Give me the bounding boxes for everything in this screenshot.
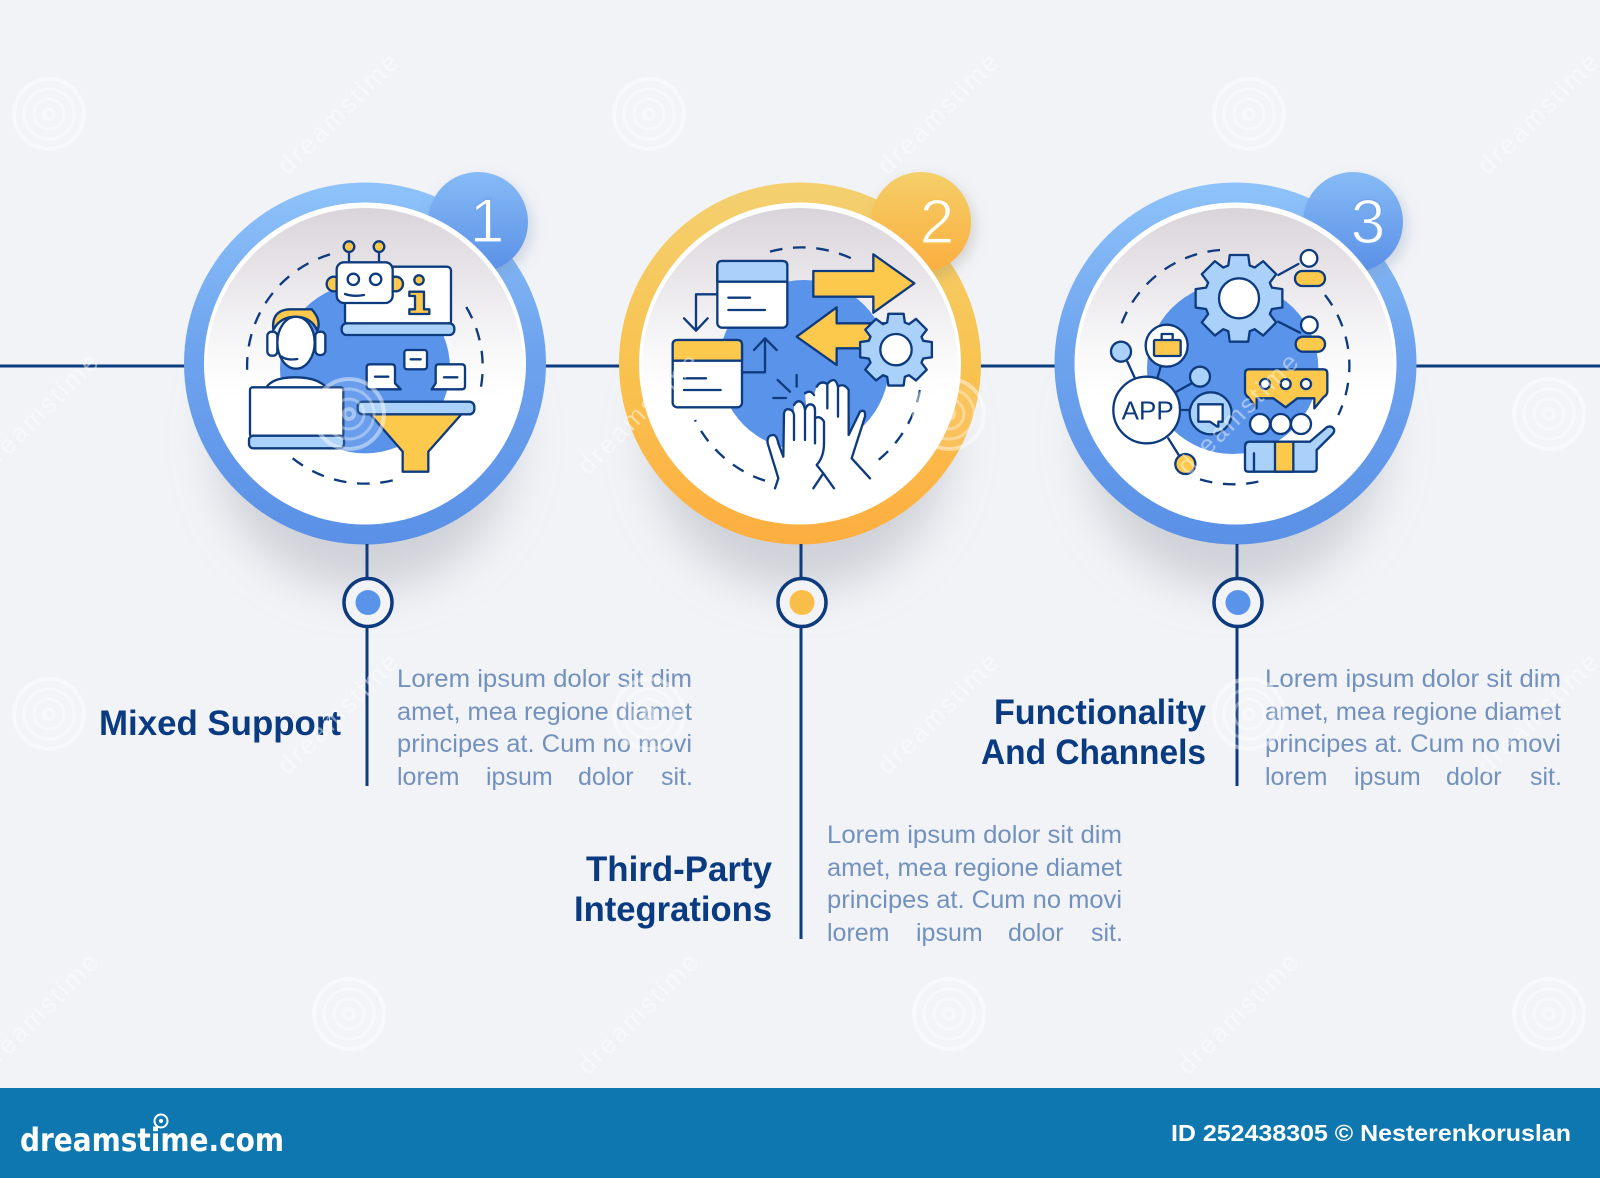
timeline marker 2 bbox=[778, 544, 826, 939]
heading: Functionality And Channels bbox=[981, 693, 1207, 772]
heading: Third-Party Integrations bbox=[574, 850, 773, 929]
text block: step 3: principes at. Cum no movi bbox=[1265, 730, 1561, 758]
badge shadow bbox=[875, 178, 975, 278]
outer ring bbox=[184, 182, 546, 544]
watermark overlay: dreamstime bbox=[1171, 945, 1306, 1080]
outer ring bbox=[619, 182, 981, 544]
watermark overlay: dreamstime bbox=[1171, 345, 1306, 480]
text block: step 2: amet, mea regione diamet bbox=[827, 854, 1122, 882]
text block: step 1: principes at. Cum no movi bbox=[397, 730, 692, 758]
text block: step 1: amet, mea regione diamet bbox=[397, 698, 692, 726]
number: 2 bbox=[920, 188, 954, 257]
horizontal connector line bbox=[0, 364, 1600, 368]
footer credit: ID 252438305 © Nesterenkoruslan bbox=[1171, 1120, 1571, 1146]
number badge bbox=[871, 172, 971, 272]
watermark overlay: dreamstime bbox=[571, 945, 706, 1080]
panel: step 2 circle bbox=[619, 172, 981, 590]
white disc bbox=[1074, 202, 1396, 524]
watermark overlay: dreamstime bbox=[271, 645, 406, 780]
text block: step 2: sit. bbox=[1091, 919, 1123, 947]
text block: step 2: lorem bbox=[827, 919, 890, 947]
heading: Third-Party Integrations: Integrations bbox=[574, 890, 772, 929]
text block: step 3: ipsum bbox=[1354, 763, 1421, 791]
watermark overlay: dreamstime bbox=[871, 645, 1006, 780]
shadow bbox=[650, 290, 950, 590]
badge shadow bbox=[1307, 178, 1407, 278]
timeline marker 3 bbox=[1214, 544, 1262, 786]
heading: Functionality And Channels: Functionality bbox=[994, 693, 1207, 732]
icon: third-party integrations bbox=[673, 247, 932, 488]
watermark overlay: dreamstime bbox=[871, 45, 1006, 180]
inner shaded disc bbox=[1078, 208, 1394, 524]
text block: step 2 bbox=[827, 821, 1123, 947]
app label: APP bbox=[1122, 395, 1174, 425]
text block: step 3: dolor bbox=[1446, 763, 1502, 791]
inner shaded disc bbox=[642, 208, 958, 524]
number: 3 bbox=[1351, 188, 1385, 257]
text block: step 3: sit. bbox=[1530, 763, 1562, 791]
watermark overlay: dreamstime bbox=[571, 345, 706, 480]
inner shaded disc bbox=[207, 208, 523, 524]
text block: step 1: ipsum bbox=[486, 763, 553, 791]
text block: step 3: Lorem ipsum dolor sit dim bbox=[1265, 665, 1561, 693]
text block: step 1: dolor bbox=[578, 763, 634, 791]
footer bar bbox=[0, 1088, 1600, 1178]
watermark overlay: dreamstime bbox=[271, 45, 406, 180]
icon: functionality and channels bbox=[1111, 250, 1349, 484]
text block: step 1: sit. bbox=[661, 763, 693, 791]
text block: step 3: amet, mea regione diamet bbox=[1265, 698, 1561, 726]
number badge bbox=[428, 172, 528, 272]
outer ring bbox=[1054, 182, 1416, 544]
text block: step 2: Lorem ipsum dolor sit dim bbox=[827, 821, 1122, 849]
text block: step 1 bbox=[397, 665, 693, 791]
number: 1 bbox=[470, 187, 504, 256]
timeline marker 1 bbox=[344, 544, 392, 786]
footer logo: dreamstime.com bbox=[20, 1121, 284, 1159]
text block: step 3: lorem bbox=[1265, 763, 1328, 791]
panel: step 3 circle bbox=[1054, 172, 1416, 590]
text block: step 1: Lorem ipsum dolor sit dim bbox=[397, 665, 692, 693]
text block: step 3 bbox=[1265, 665, 1562, 791]
text block: step 1: lorem bbox=[397, 763, 460, 791]
heading: Third-Party Integrations: Third-Party bbox=[586, 850, 773, 889]
text block: step 2: dolor bbox=[1008, 919, 1064, 947]
shadow bbox=[215, 290, 515, 590]
number badge bbox=[1303, 172, 1403, 272]
shadow bbox=[1086, 290, 1386, 590]
panel: step 1 circle bbox=[184, 172, 546, 590]
white disc bbox=[204, 202, 526, 524]
white disc bbox=[639, 202, 961, 524]
icon: mixed support bbox=[247, 241, 483, 484]
badge shadow bbox=[432, 178, 532, 278]
text block: step 2: ipsum bbox=[916, 919, 983, 947]
text block: step 2: principes at. Cum no movi bbox=[827, 886, 1122, 914]
heading: Functionality And Channels: And Channels bbox=[981, 733, 1206, 772]
heading: Mixed Support: Mixed Support bbox=[99, 704, 341, 743]
